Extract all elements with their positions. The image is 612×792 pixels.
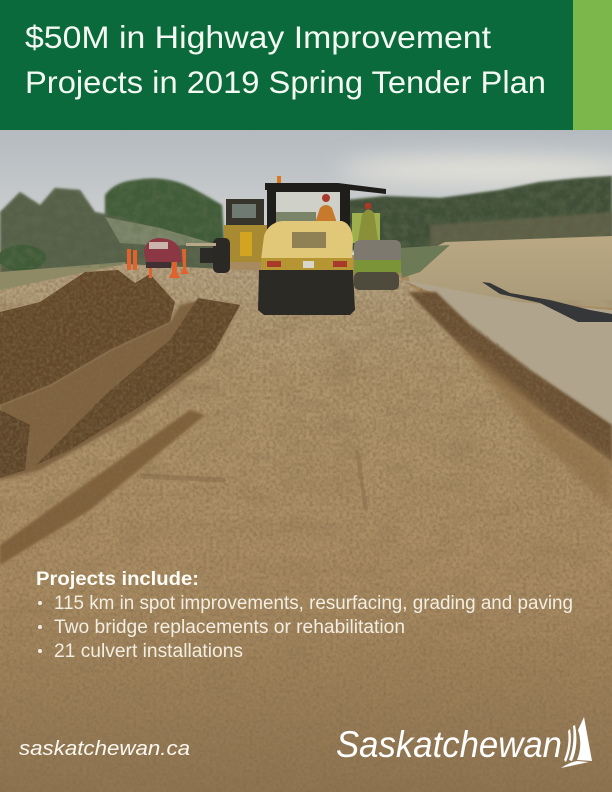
green padfoot roller xyxy=(352,213,401,290)
left treeline and hill xyxy=(0,179,225,292)
list item 2: Two bridge replacements or rehabilitation xyxy=(54,617,405,638)
website url: saskatchewan.ca xyxy=(19,738,190,760)
header banner xyxy=(0,0,612,130)
tyre tracks xyxy=(140,450,366,510)
icon: wheat sheaf xyxy=(561,717,592,768)
main roller with cab xyxy=(258,176,386,315)
light green accent strip xyxy=(573,0,612,130)
title: $50M in Highway Improvement xyxy=(25,19,491,55)
list item 1: 115 km in spot improvements, resurfacing, grading and paving xyxy=(54,593,573,614)
road surface and ground xyxy=(0,264,612,792)
sky xyxy=(0,130,612,255)
left dirt piles xyxy=(0,270,240,565)
red car xyxy=(144,238,182,268)
right gravel shoulder xyxy=(402,280,612,440)
black silt fence xyxy=(482,282,612,322)
motor grader xyxy=(186,199,268,273)
orange traffic delineators xyxy=(127,249,189,278)
list item 3: 21 culvert installations xyxy=(54,641,243,662)
title: Projects in 2019 Spring Tender Plan xyxy=(25,64,546,100)
road grain texture xyxy=(0,262,612,792)
road mottling xyxy=(0,300,612,792)
Saskatchewan logo xyxy=(336,717,592,768)
projects list xyxy=(36,569,573,662)
right treeline xyxy=(300,176,612,252)
list heading: Projects include: xyxy=(36,569,199,590)
wordmark: Saskatchewan xyxy=(336,724,562,765)
foliage texture xyxy=(0,176,612,268)
right reed field xyxy=(405,236,612,308)
